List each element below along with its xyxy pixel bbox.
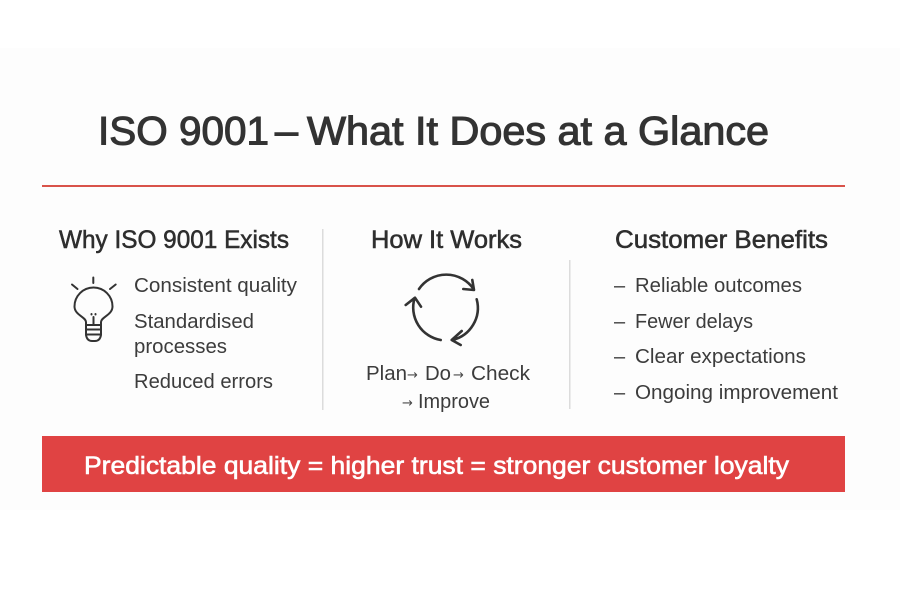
panel: why ISO 9001 exists [59,226,297,393]
heading: how it works: How It Works [371,226,522,254]
banner [42,436,845,492]
list: why items: Consistent quality [134,275,297,297]
divider [322,229,324,410]
list: benefits: Fewer delays [635,311,753,333]
banner background [42,436,845,492]
caption: plan do check improve: → [402,396,413,411]
caption: plan do check improve: → [453,368,464,383]
divider [569,260,570,409]
list: why items [134,275,297,393]
heading: why ISO 9001 exists: Why ISO 9001 Exists [59,226,289,254]
list: why items: Standardised [134,311,254,333]
caption: plan do check improve [366,363,531,413]
list: benefits: – [614,382,626,404]
title rule [42,185,845,187]
background panel [0,48,900,510]
list: why items: processes [134,336,227,358]
banner text: Predictable quality = higher trust = stronger customer loyalty [84,452,790,480]
list: benefits: – [614,346,626,368]
list: benefits: – [614,275,626,297]
caption: plan do check improve: Check [471,363,531,385]
title: ISO 9001 [98,110,269,154]
list: benefits: – [614,311,626,333]
caption: plan do check improve: → [407,368,418,383]
caption: plan do check improve: Plan [366,363,407,385]
panel: customer benefits [614,226,838,404]
title: – [275,110,299,154]
list: benefits: Reliable outcomes [635,275,802,297]
list: benefits [614,275,838,404]
panel: how it works [366,226,531,413]
heading: customer benefits: Customer Benefits [615,226,828,254]
title: What It Does at a Glance [307,110,769,154]
caption: plan do check improve: Improve [418,391,490,413]
list: why items: Reduced errors [134,371,273,393]
list: benefits: Clear expectations [635,346,806,368]
icon: light bulb [72,278,116,341]
list: benefits: Ongoing improvement [635,382,838,404]
title [98,110,769,154]
caption: plan do check improve: Do [425,363,451,385]
icon: cycle arrows [406,275,478,345]
